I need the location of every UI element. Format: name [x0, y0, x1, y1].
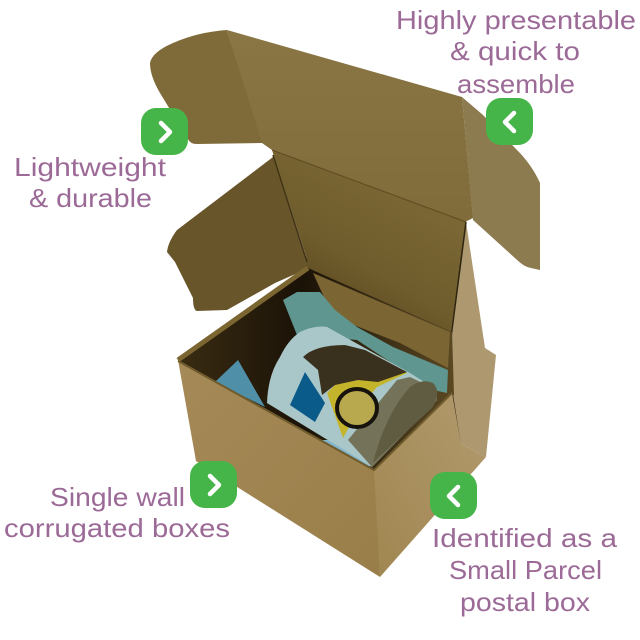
box front face	[178, 360, 380, 577]
raised front flap	[449, 222, 496, 457]
right lid tuck flap	[462, 97, 540, 270]
text: postal box: postal box	[460, 587, 590, 617]
bicycle wheel	[337, 389, 377, 427]
text: single wall: Single wall	[50, 482, 185, 512]
back inner wall band	[313, 273, 450, 368]
text: durable: & durable	[29, 183, 152, 213]
callout: top right	[396, 5, 636, 145]
box rim edges	[178, 361, 452, 470]
back flap inner wall	[272, 150, 466, 340]
icon: right chevron badge	[190, 461, 237, 508]
text: lightweight: Lightweight	[14, 152, 167, 182]
left box flap	[167, 157, 309, 311]
callout: right lower	[430, 472, 618, 617]
interior of box	[178, 268, 454, 472]
teal tissue paper	[215, 292, 448, 467]
cardboard box illustration	[150, 30, 540, 577]
text: assemble: assemble	[457, 69, 575, 99]
text: identified as a: Identified as a	[432, 523, 618, 553]
callout: left upper	[14, 108, 188, 213]
text: small parcel: Small Parcel	[449, 555, 602, 585]
box right face	[374, 393, 486, 577]
icon: left chevron badge	[430, 472, 477, 519]
callout: left lower	[4, 461, 237, 543]
text: quick to: & quick to	[450, 36, 580, 66]
icon: left chevron badge	[486, 98, 533, 145]
icon: right chevron badge	[141, 108, 188, 155]
mug base	[348, 377, 437, 467]
main lid panel	[227, 30, 473, 222]
mug with cyclist print	[267, 327, 437, 467]
text: corrugated boxes: corrugated boxes	[4, 513, 230, 543]
text: highly presentable: Highly presentable	[396, 5, 636, 35]
top-left lid tuck flap	[150, 30, 263, 144]
